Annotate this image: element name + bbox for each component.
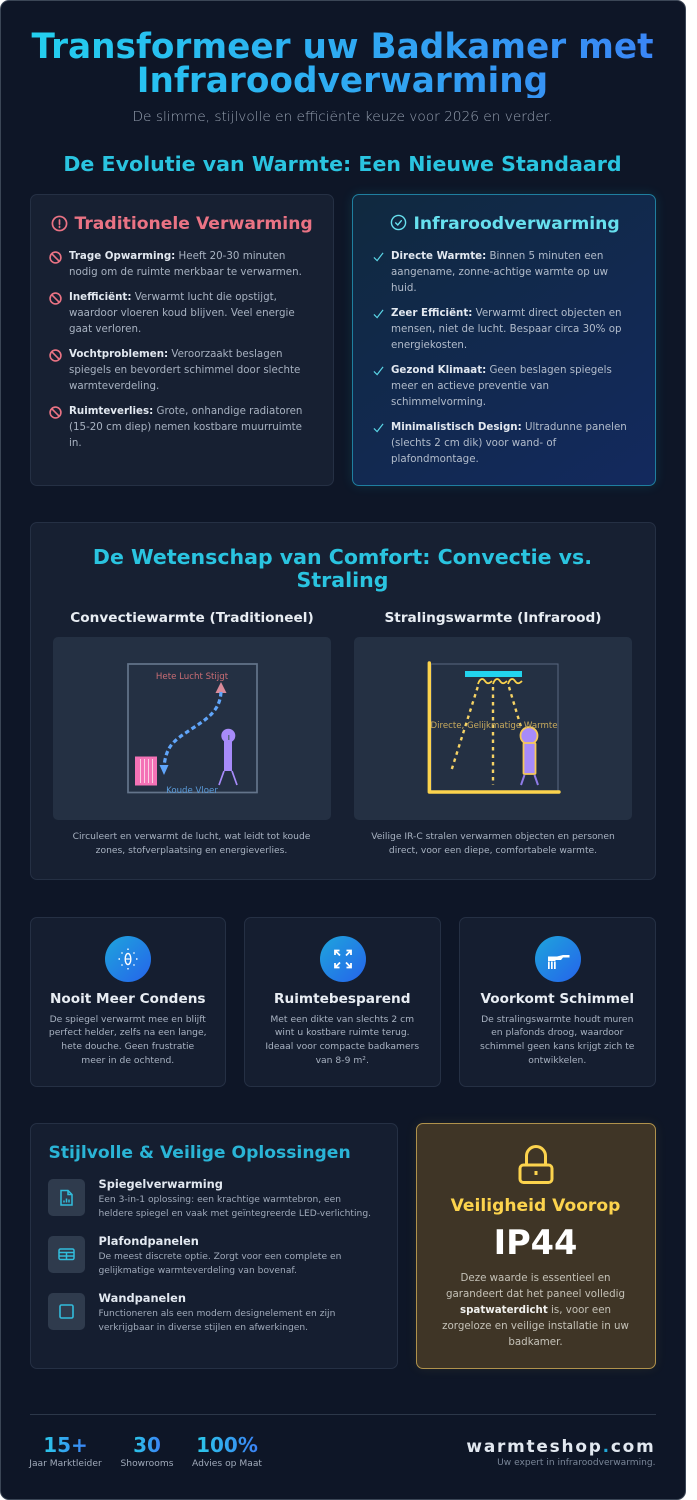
text: hete douche. Geen frustratie [61, 1041, 194, 1052]
subtitle: De slimme, stijlvolle en efficiënte keuze voor 2026 en verder. [133, 108, 552, 124]
text: De spiegel verwarmt mee en blijft [50, 1014, 206, 1024]
text: en plafonds droog, waardoor [491, 1027, 623, 1038]
heat waves [478, 679, 522, 684]
infrared rays [450, 686, 520, 784]
heading: veiligheid voorop: Veiligheid Voorop [451, 1196, 620, 1216]
text: perfect helder, zelfs na een lange, [49, 1027, 207, 1038]
list item: directe warmte [391, 250, 608, 294]
value: 30 [133, 1432, 161, 1456]
icon: ban [49, 292, 62, 305]
panel: ruimtebesparend [244, 916, 440, 1086]
heading: infraroodverwarming: Infraroodverwarming [414, 214, 620, 234]
heading: Nooit Meer Condens [50, 990, 206, 1006]
text: ip44: zorgeloze en veilige installatie in uw [442, 1320, 629, 1332]
title: Infraroodverwarming [137, 61, 548, 101]
stat: 15+ [28, 1432, 102, 1468]
list item: ruimteverlies [69, 404, 302, 448]
panel: oplossingen [30, 1122, 398, 1368]
icon: spiegel [48, 1178, 84, 1216]
heading: Voorkomt Schimmel [480, 990, 634, 1006]
text: wandpanelen [98, 1308, 335, 1332]
list item: vochtproblemen: Vochtproblemen: Veroorzaakt beslagen [69, 348, 283, 360]
list item: trage opwarming: nodig om de ruimte merkbaar te verwarmen. [69, 266, 302, 278]
text: spiegelverwarming [98, 1194, 371, 1218]
brand: warmteshop.com [466, 1436, 656, 1456]
footer divider [30, 1414, 656, 1415]
person [218, 728, 236, 784]
icon: check circle [390, 214, 406, 230]
list item: gezond klimaat: Gezond Klimaat: Geen beslagen spiegels [391, 364, 612, 376]
label: koude vloer: Koude Vloer [166, 786, 218, 796]
list item: gezond klimaat: schimmelvorming. [391, 396, 486, 408]
label: Advies op Maat [192, 1458, 262, 1468]
heading: traditionele verwarming: Traditionele Verwarming [74, 214, 313, 234]
person with warmth outline [520, 727, 538, 784]
title: spiegelverwarming: Spiegelverwarming [98, 1176, 223, 1190]
text: ip44: Deze waarde is essentieel en [460, 1272, 611, 1284]
text: ip44: garandeert dat het paneel volledig [446, 1288, 625, 1300]
heading: convectie vs straling: De Wetenschap van Comfort: Convectie vs. [93, 545, 592, 569]
caption: convectie: zones, stofverplaatsing en energieverlies. [96, 844, 287, 856]
panel: nooit meer condens [30, 916, 226, 1086]
text: schimmel geen kans krijgt zich te [480, 1041, 634, 1052]
value: 15+ [43, 1432, 88, 1456]
heading: evolutie: De Evolutie van Warmte: Een Nieuwe Standaard [63, 152, 622, 176]
list item: gezond klimaat: meer en actieve preventie van [391, 380, 549, 392]
heading: oplossingen: Stijlvolle & Veilige Oplossingen [48, 1142, 351, 1162]
text: van 8-9 m². [316, 1055, 369, 1066]
title [0, 30, 686, 98]
caption: straling: direct, voor een diepe, comfortabele warmte. [389, 844, 597, 856]
label: Showrooms [120, 1458, 173, 1468]
radiator [134, 756, 156, 785]
list item: vochtproblemen: warmteverdeling. [69, 380, 159, 392]
text: plafondpanelen: gelijkmatige warmteverdeling van bovenaf. [98, 1266, 297, 1276]
arrow: luchtstroom [159, 682, 226, 774]
icon: spray [534, 936, 580, 982]
ir panel [464, 670, 522, 676]
list item: ruimteverlies: in. [69, 436, 82, 448]
icon: expand arrows [320, 936, 366, 982]
list item: inefficient: Inefficiënt: Verwarmt lucht die opstijgt, [69, 290, 277, 302]
text: Ideaal voor compacte badkamers [265, 1041, 419, 1052]
panel: voorkomt schimmel [459, 916, 656, 1086]
text: plafondpanelen: De meest discrete optie. Zorgt voor een complete en [98, 1252, 341, 1262]
list item: minimalistisch design [391, 420, 627, 464]
tagline: Uw expert in infraroodverwarming. [497, 1458, 656, 1468]
icon: warning [52, 216, 68, 232]
list item: zeer efficient: mensen, niet de lucht. Bespaar circa 30% op [391, 322, 622, 334]
text: spiegelverwarming: Een 3-in-1 oplossing: een krachtige warmtebron, een [98, 1194, 341, 1204]
caption: convectie [73, 830, 310, 856]
diagram box: convectie [52, 636, 330, 820]
list item: inefficient: waardoor vloeren koud blijven. Veel energie [69, 306, 295, 318]
list item: zeer efficient: energiekosten. [391, 338, 467, 350]
list item: inefficient [69, 290, 295, 334]
list item: zeer efficient [391, 306, 622, 350]
text [265, 1014, 419, 1066]
text: wint u kostbare ruimte terug. [275, 1027, 410, 1038]
icon: check [374, 366, 384, 376]
list item: zeer efficient: Zeer Efficiënt: Verwarmt direct objecten en [391, 306, 622, 318]
text: ip44 [442, 1272, 629, 1348]
icon: condens [105, 936, 151, 982]
stat: 100% [192, 1432, 262, 1468]
icon: lock [518, 1145, 554, 1184]
list item: trage opwarming [69, 250, 302, 278]
label: hete lucht: Hete Lucht Stijgt [155, 672, 228, 682]
list item: ruimteverlies: (15-20 cm diep) nemen kostbare muurruimte [69, 420, 302, 432]
label: directe warmte: Directe, Gelijkmatige Warmte [430, 720, 557, 730]
diagram box: straling [354, 636, 632, 820]
wall and floor [429, 662, 558, 792]
text [49, 1014, 207, 1066]
value: ip44: IP44 [494, 1222, 577, 1262]
text: wandpanelen: verkrijgbaar in diverse stijlen en afwerkingen. [98, 1322, 308, 1332]
caption: straling: Veilige IR-C stralen verwarmen objecten en personen [371, 830, 615, 842]
list item: inefficient: gaat verloren. [69, 322, 141, 334]
subheading: stralingswarmte: Stralingswarmte (Infrarood) [384, 610, 602, 626]
icon: ban [49, 251, 62, 264]
panel: wetenschap van comfort [30, 522, 656, 880]
list item: directe warmte: aangename, zonne-achtige warmte op uw [391, 266, 608, 278]
list item: minimalistisch design: (slechts 2 cm dik) voor wand- of [391, 436, 556, 448]
text: wandpanelen: Functioneren als een modern designelement en zijn [98, 1308, 335, 1318]
list item: directe warmte: Directe Warmte: Binnen 5 minuten een [391, 250, 603, 262]
text: Met een dikte van slechts 2 cm [270, 1014, 414, 1024]
icon: plafond [48, 1236, 84, 1273]
value: 100% [196, 1432, 258, 1456]
icon: check [374, 424, 384, 432]
text: ip44: badkamer. [508, 1336, 563, 1348]
list item: vochtproblemen: spiegels en bevordert schimmel door slechte [69, 364, 300, 376]
icon: wand [48, 1293, 84, 1330]
text: plafondpanelen [98, 1252, 341, 1276]
title: Transformeer uw Badkamer met [31, 27, 654, 67]
panel: infraroodverwarming [352, 194, 656, 486]
list item: directe warmte: huid. [391, 282, 417, 294]
list item: vochtproblemen [69, 348, 300, 392]
title: plafondpanelen: Plafondpanelen [98, 1234, 199, 1248]
list item: minimalistisch design: Minimalistisch Design: Ultradunne panelen [391, 420, 627, 432]
label: Jaar Marktleider [29, 1458, 102, 1468]
list item: trage opwarming: Trage Opwarming: Heeft 20-30 minuten [69, 250, 285, 262]
title: wandpanelen: Wandpanelen [98, 1290, 186, 1304]
heading: convectie vs straling: Straling [297, 568, 388, 592]
subheading: convectiewarmte: Convectiewarmte (Traditioneel) [70, 610, 314, 626]
text: De stralingswarmte houdt muren [481, 1014, 633, 1024]
panel: veiligheid [416, 1122, 656, 1368]
chart: convectie diagram [127, 663, 258, 796]
text: meer in de ochtend. [81, 1055, 174, 1066]
icon: check [374, 252, 384, 262]
caption: convectie: Circuleert en verwarmt de lucht, wat leidt tot koude [73, 830, 310, 842]
list item: ruimteverlies: Ruimteverlies: Grote, onhandige radiatoren [69, 404, 302, 416]
text: ip44: spatwaterdicht is, voor een [460, 1304, 611, 1316]
panel: traditionele verwarming [30, 194, 334, 486]
heading: Ruimtebesparend [274, 990, 410, 1006]
stat: 30 [120, 1432, 174, 1468]
icon: ban [49, 406, 62, 419]
list item: gezond klimaat [391, 364, 612, 408]
icon: check [374, 310, 384, 318]
text: ontwikkelen. [528, 1055, 586, 1066]
text: spiegelverwarming: heldere spiegel en vaak met geïntegreerde LED-verlichting. [98, 1208, 371, 1218]
heading: convectie vs straling [93, 545, 592, 592]
chart: straling diagram [428, 661, 561, 794]
list item: minimalistisch design: plafondmontage. [391, 452, 479, 464]
icon: ban [49, 349, 62, 362]
text [480, 1014, 634, 1066]
caption: straling [371, 830, 615, 856]
